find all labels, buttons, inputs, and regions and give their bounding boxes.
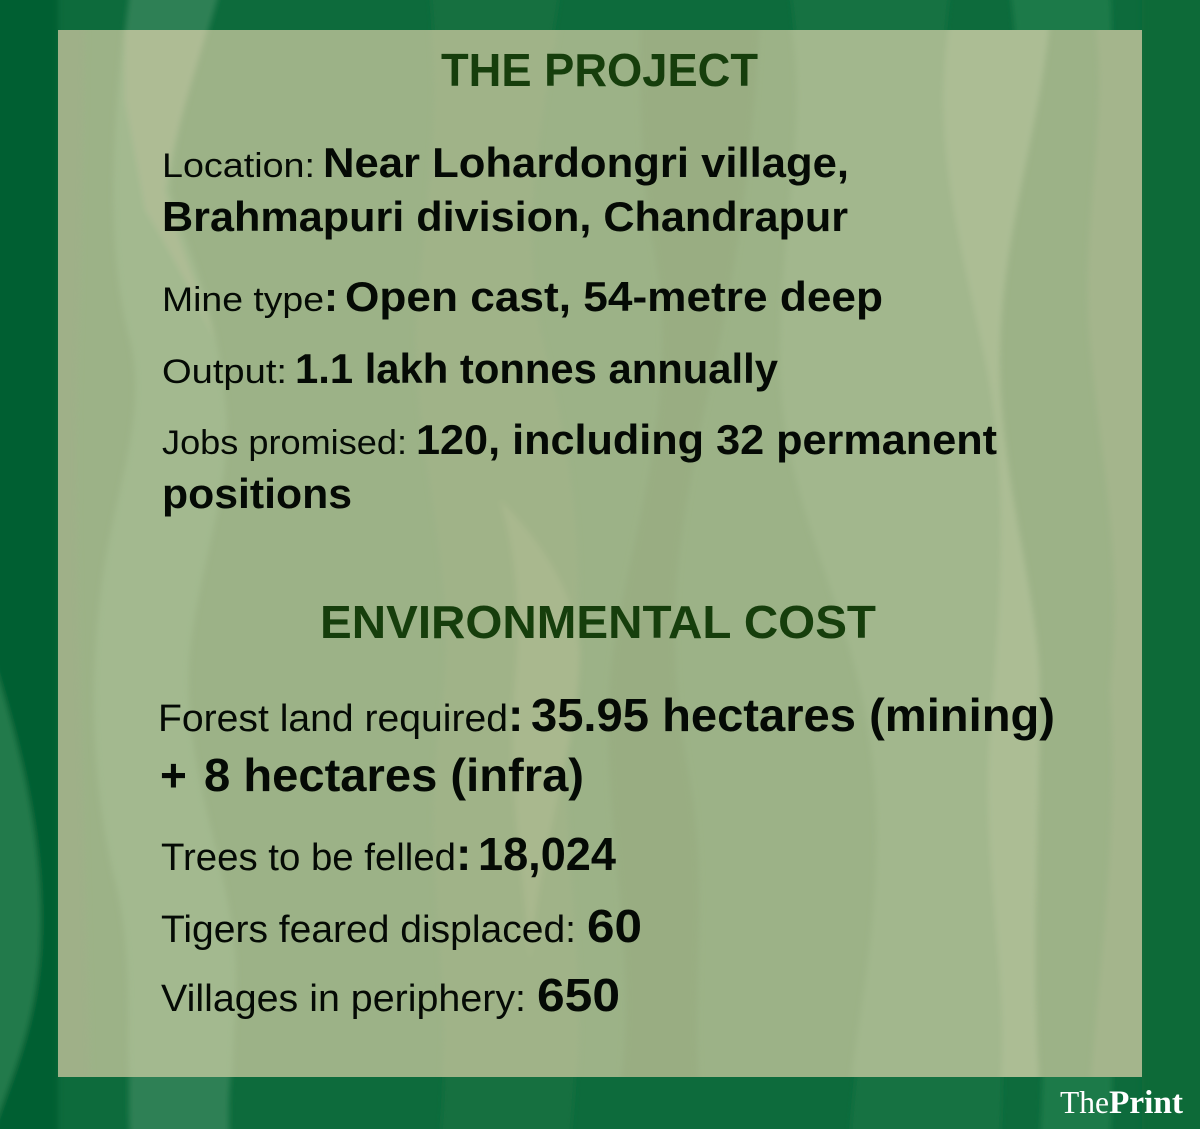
text block: forest land required: 35.95 hectares (mining) xyxy=(531,689,1055,741)
heading: environmental cost: ENVIRONMENTAL COST xyxy=(320,596,876,648)
text block: trees to be felled xyxy=(161,828,616,880)
text block: villages in periphery: Villages in periphery: xyxy=(161,978,526,1020)
text block: tigers feared displaced: 60 xyxy=(587,900,642,952)
text block: trees to be felled: 18,024 xyxy=(478,828,616,880)
logo: ThePrint: Print xyxy=(1109,1085,1183,1121)
text block: forest land required: 8 hectares (infra) xyxy=(204,749,584,801)
text block: output: Output: xyxy=(162,353,287,391)
text block: location xyxy=(162,139,849,240)
logo: ThePrint xyxy=(1060,1084,1183,1121)
text block: forest land required: + xyxy=(160,749,187,801)
text block: jobs promised: positions xyxy=(162,470,352,517)
text block: villages in periphery: 650 xyxy=(537,969,620,1021)
text block: jobs promised xyxy=(162,416,997,517)
text block: forest land required: Forest land required xyxy=(158,698,508,740)
text block: mine type: : xyxy=(324,273,338,320)
text block: mine type: Mine type xyxy=(162,281,324,319)
text block: tigers feared displaced: Tigers feared displaced: xyxy=(161,909,576,951)
text block: location: Brahmapuri division, Chandrapur xyxy=(162,193,848,240)
text block: location: Near Lohardongri village, xyxy=(323,139,849,186)
text block: jobs promised: Jobs promised: xyxy=(162,424,407,462)
text block: villages in periphery xyxy=(161,969,620,1021)
heading: the project: THE PROJECT xyxy=(441,44,758,96)
text block: location: Location: xyxy=(162,147,315,185)
logo: ThePrint: The xyxy=(1060,1084,1109,1120)
text block: trees to be felled: : xyxy=(456,828,471,880)
text block: forest land required xyxy=(158,689,1055,801)
text block: output: 1.1 lakh tonnes annually xyxy=(295,345,779,392)
text block: trees to be felled: Trees to be felled xyxy=(161,837,456,879)
text block: tigers feared displaced xyxy=(161,900,642,952)
text block: forest land required: : xyxy=(508,689,523,741)
text block: mine type: Open cast, 54-metre deep xyxy=(345,273,883,320)
text block: jobs promised: 120, including 32 permanent xyxy=(416,416,997,463)
